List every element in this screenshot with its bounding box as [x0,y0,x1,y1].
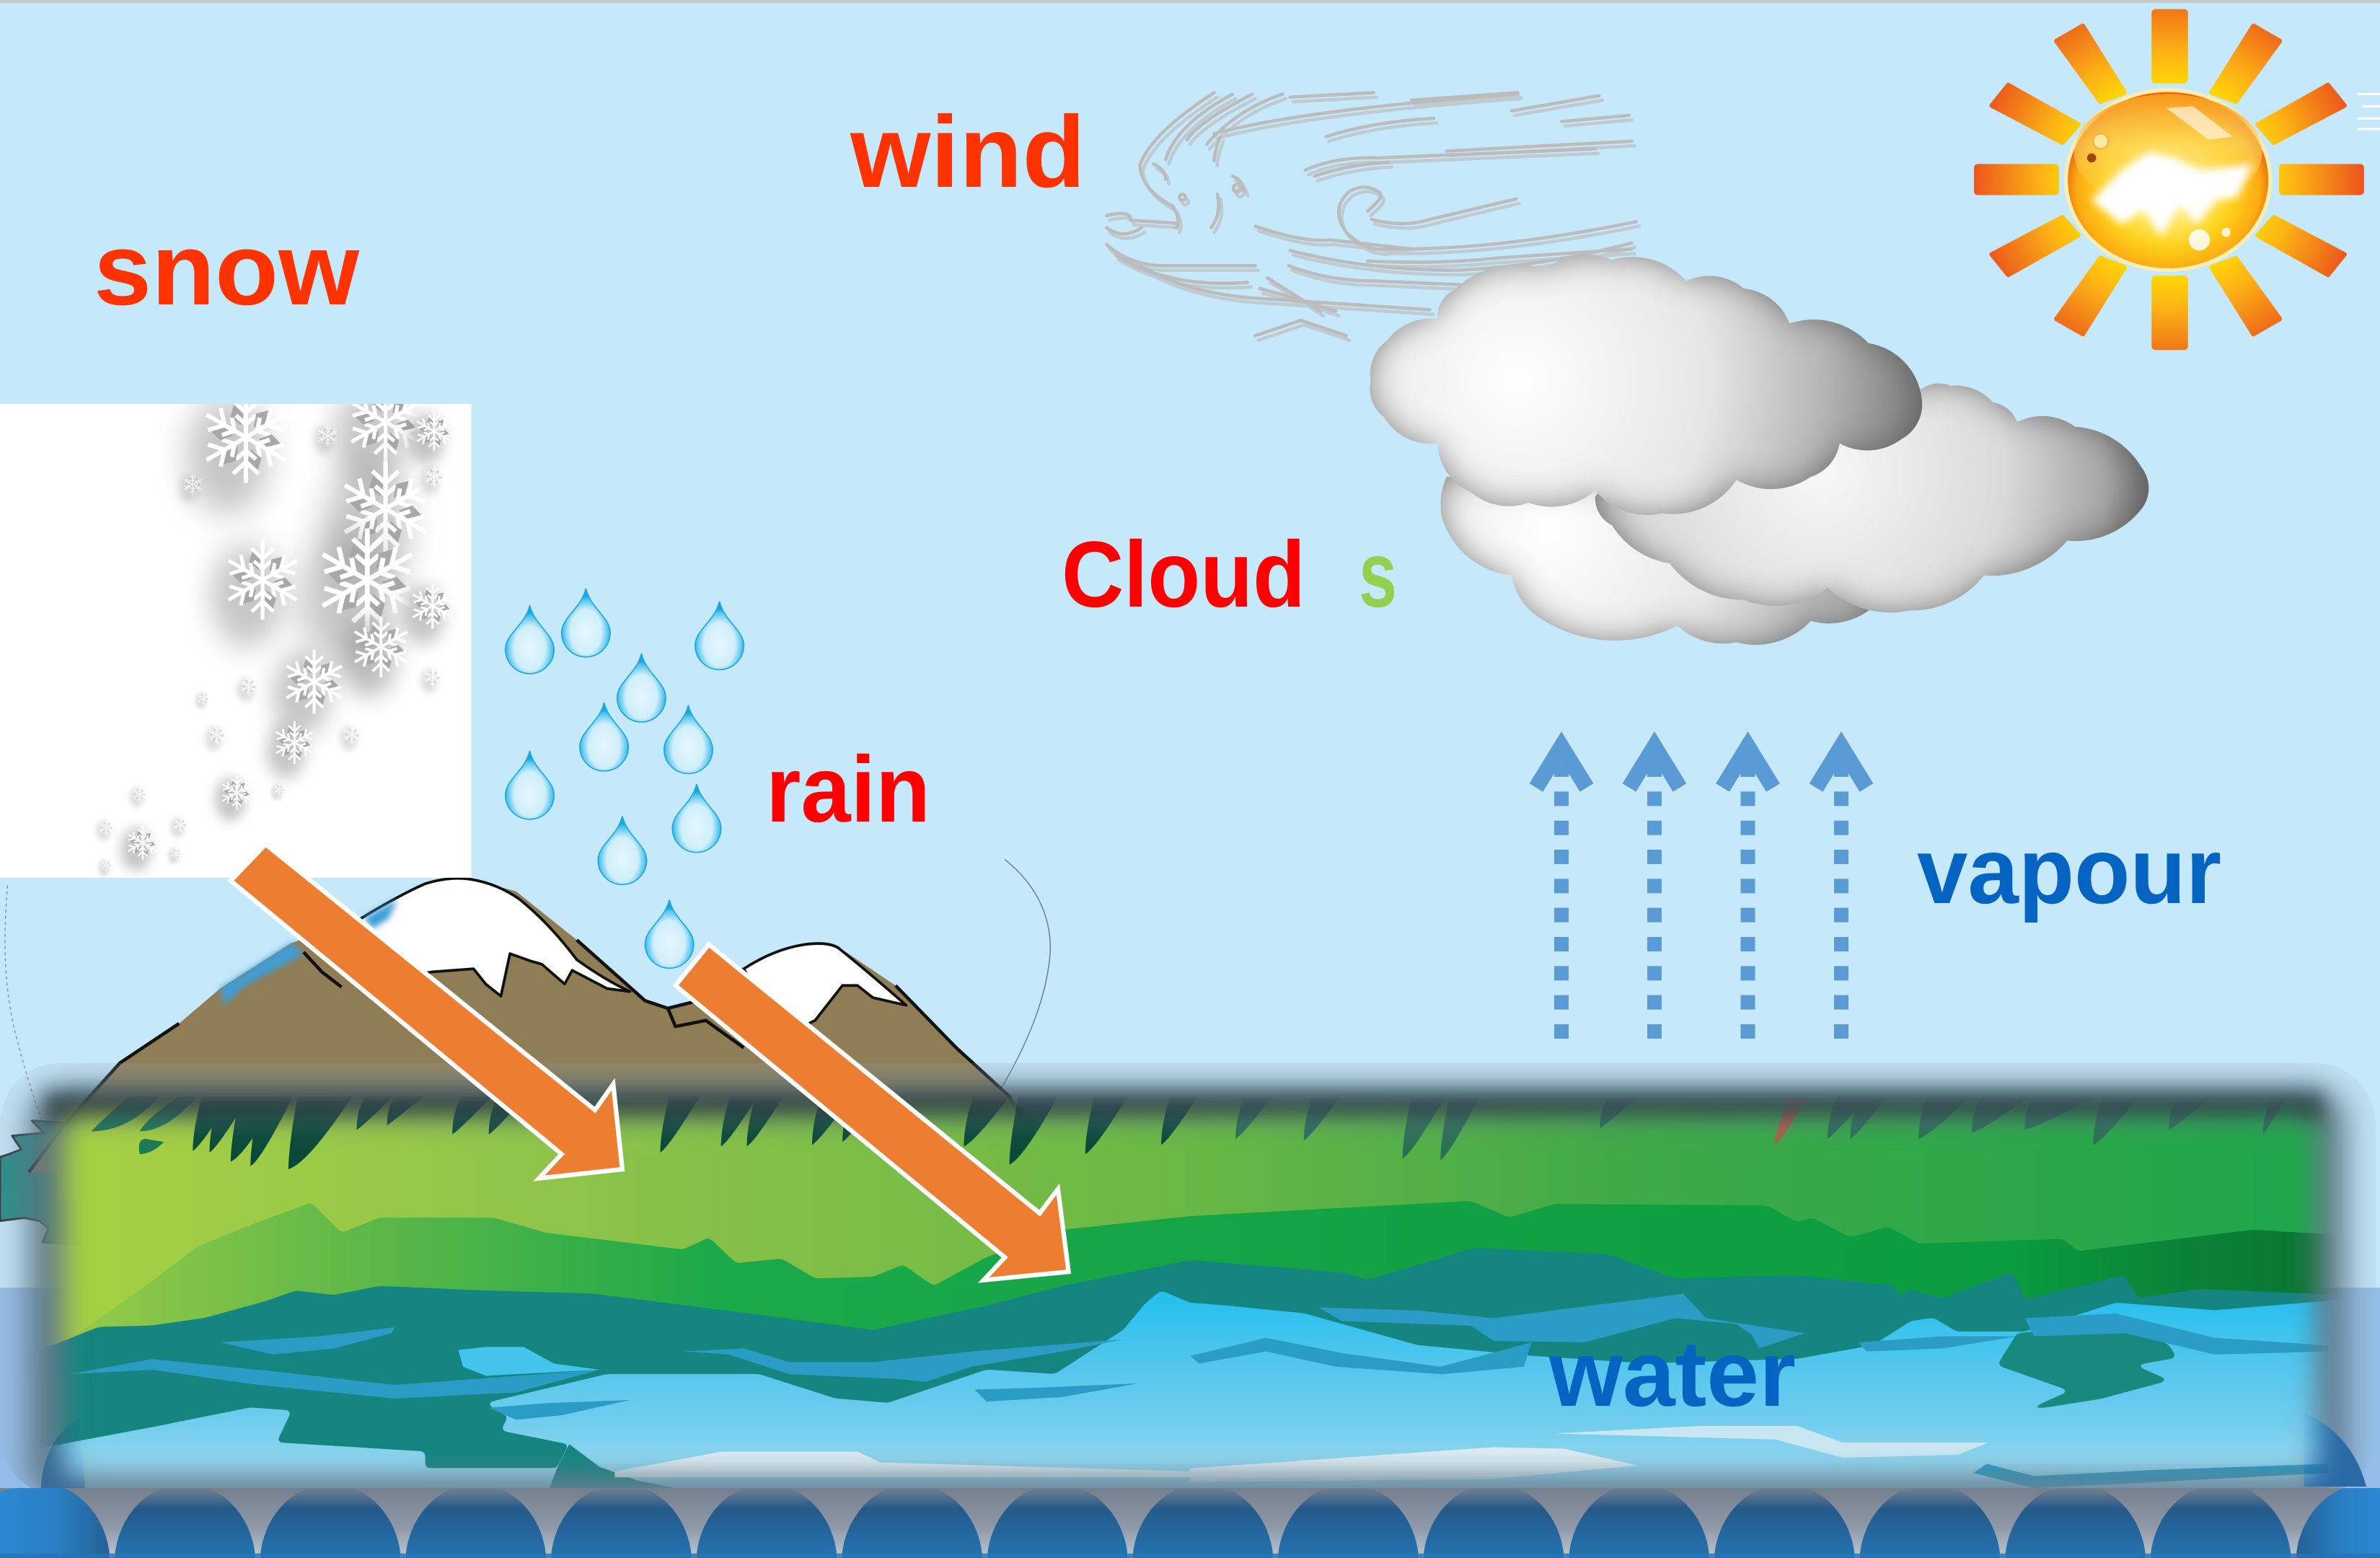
blue snow shading [220,899,397,1005]
back left cloud [1441,477,1876,645]
snowflakes [97,383,457,876]
sun white reflection [2092,152,2252,237]
landscape: grass and river [46,1098,2335,1488]
label: wind: wind [850,94,1085,208]
teal tail [550,1444,674,1488]
label: rain: rain [766,736,930,842]
sun top shading [2074,94,2262,210]
grass blades left [193,1096,1198,1169]
wisps [69,1294,2328,1488]
label: water: water [1548,1321,1796,1426]
snow panel [0,383,471,878]
light green meadow [46,1098,2334,1346]
teal island right [1999,1332,2175,1408]
label: s: s [1359,521,1397,627]
label: Cloud: Cloud [1062,521,1305,627]
tree at left edge [0,1121,91,1245]
mountains [29,879,1062,1200]
brown grass blade [1774,1096,1806,1145]
soft frame [0,1063,2376,1503]
sun bubbles [2189,229,2210,250]
light patch in teal [459,1347,599,1376]
blue rounded corner right [2304,1412,2366,1487]
bottom scallops [0,1488,2380,1558]
sun body [2068,92,2268,268]
vapour arrow 3 [1722,747,1773,1039]
white streaks right of sun [2357,94,2380,129]
top edge strip [0,0,2380,3]
snow cap big [357,879,630,996]
dashed guide arc right [1002,860,1050,1087]
mountain body [29,879,1062,1200]
wind face sketch [1106,92,1639,340]
vapour arrows [1536,747,1866,1039]
small teal blades [91,1096,198,1154]
label: vapour: vapour [1917,818,2221,923]
sun [1975,10,2363,349]
vapour arrow 1 [1536,747,1587,1039]
label: snow: snow [94,212,360,327]
sun rays [1975,10,2363,349]
back right cloud [1595,384,2148,612]
bottom scallop band gaps [0,1488,2380,1558]
blue rounded corner left [41,1417,85,1488]
vapour arrow 2 [1629,747,1680,1039]
top cloud [1370,255,1922,515]
clouds [1370,255,2148,645]
snow cap small [744,943,906,1037]
raindrops [506,589,744,968]
mountain outline [29,940,1020,1172]
white panel [0,404,471,878]
sun highlight [2166,106,2233,140]
teal riverbank [43,1248,2332,1469]
mid green band [74,1201,2330,1337]
orange arrow: rain to ground [676,944,1069,1280]
orange arrow: snow to ground [231,845,622,1179]
river water [30,1290,2380,1503]
sun rim [2064,88,2272,272]
foam [614,1426,1988,1482]
water band behind the landscape [0,1288,2380,1558]
grass blades right [1235,1096,2288,1160]
vapour arrow 4 [1816,747,1866,1039]
dashed guide arc left [5,885,45,1131]
